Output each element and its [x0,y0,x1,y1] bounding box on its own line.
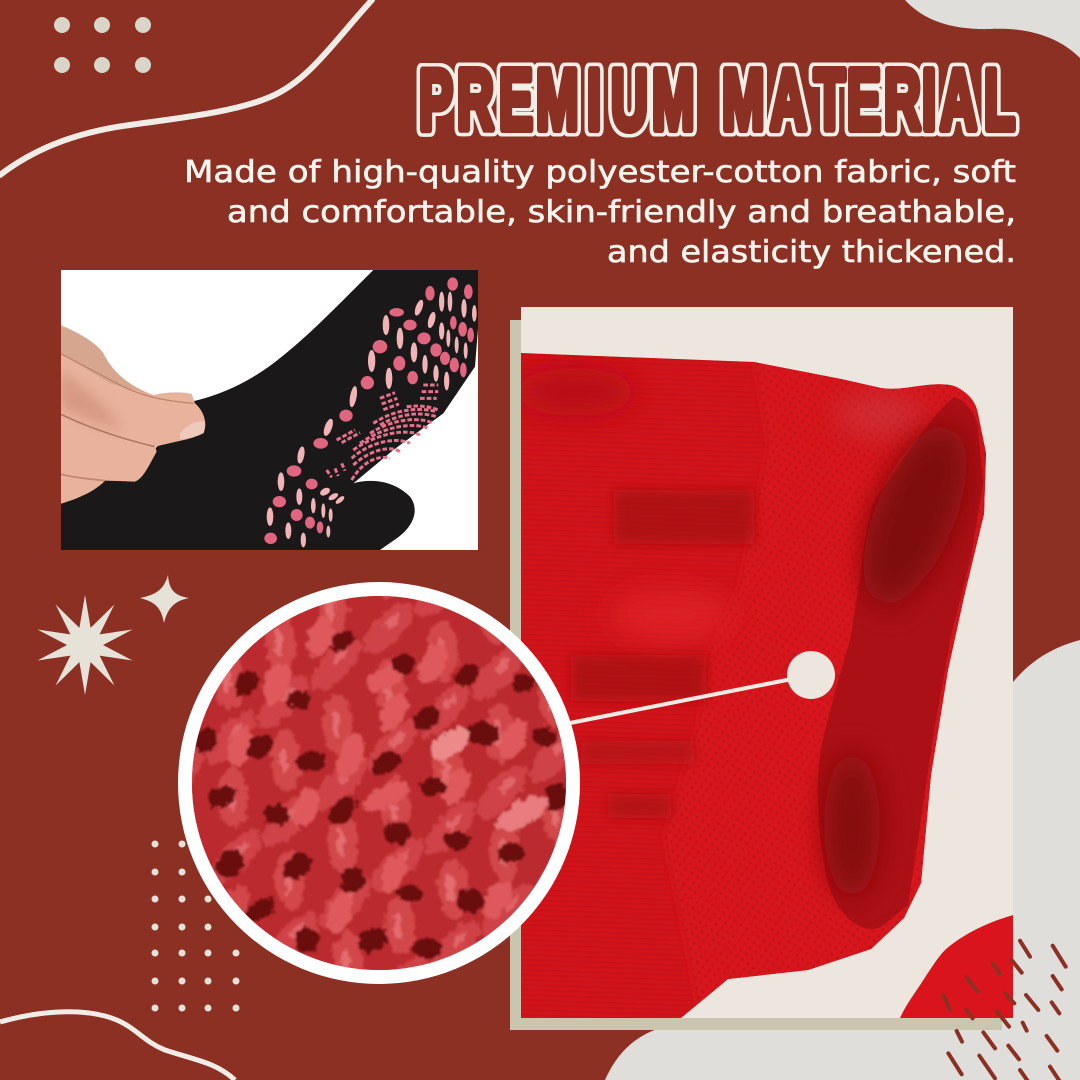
title: PREMIUM MATERIAL [420,53,1017,147]
dot grid: top left [54,17,151,73]
dark stitch gaps [196,628,565,956]
photo: red sock cuff [515,307,1013,1020]
fingernail [180,421,205,439]
ribbed leg texture [521,340,781,1020]
description text: Made of high-quality polyester-cotton fabric, soft [184,155,1016,190]
sole grip dashes [327,385,438,480]
title: PREMIUM MATERIAL [419,53,1015,147]
finger shading: knuckles [61,374,118,430]
paper blob: top right [905,0,1080,58]
finger shading: behind finger [60,325,153,395]
description text: and comfortable, skin-friendly and breathable, [227,195,1016,230]
second sock corner [900,915,1013,1018]
sole grip ovals [267,292,477,547]
sock body [60,270,480,550]
photo: black sock pinched by fingers [60,270,480,550]
crease: between first and second finger [60,353,193,403]
description text: and elasticity thickened. [607,235,1016,270]
deep shadow: upper opening [842,412,988,618]
description text [184,155,1016,270]
magnified knit circle [170,575,590,995]
decorative dashes: bottom right [943,941,1066,1080]
icon: sparkle [140,575,189,623]
crease: between second and third finger [60,414,155,447]
dot grid: lower left [152,840,240,1012]
top shaded area [515,368,635,416]
paper blob: bottom right [605,640,1080,1080]
decorative wavy line: bottom left [0,1012,235,1080]
panel shadow [510,320,1002,1030]
sole grip dots [264,277,474,544]
stitch highlights [222,612,554,938]
deep shadow: lower opening [824,753,880,897]
icon: starburst [37,595,133,695]
terry heel tone [664,340,1000,1018]
crease: between third and fourth finger [60,474,105,481]
cuff opening [818,397,983,929]
pointer dot [787,651,835,699]
fingers: all skin base [60,325,205,504]
terry knit texture [664,362,986,1000]
fabric folds [571,490,754,818]
pointer line [570,675,812,723]
cuff rim shading [835,393,925,437]
title: PREMIUM MATERIAL [418,53,1014,147]
sock shape with textures [515,340,1001,1020]
fabric highlight [610,589,730,641]
decorative wavy line: top left [0,0,372,175]
